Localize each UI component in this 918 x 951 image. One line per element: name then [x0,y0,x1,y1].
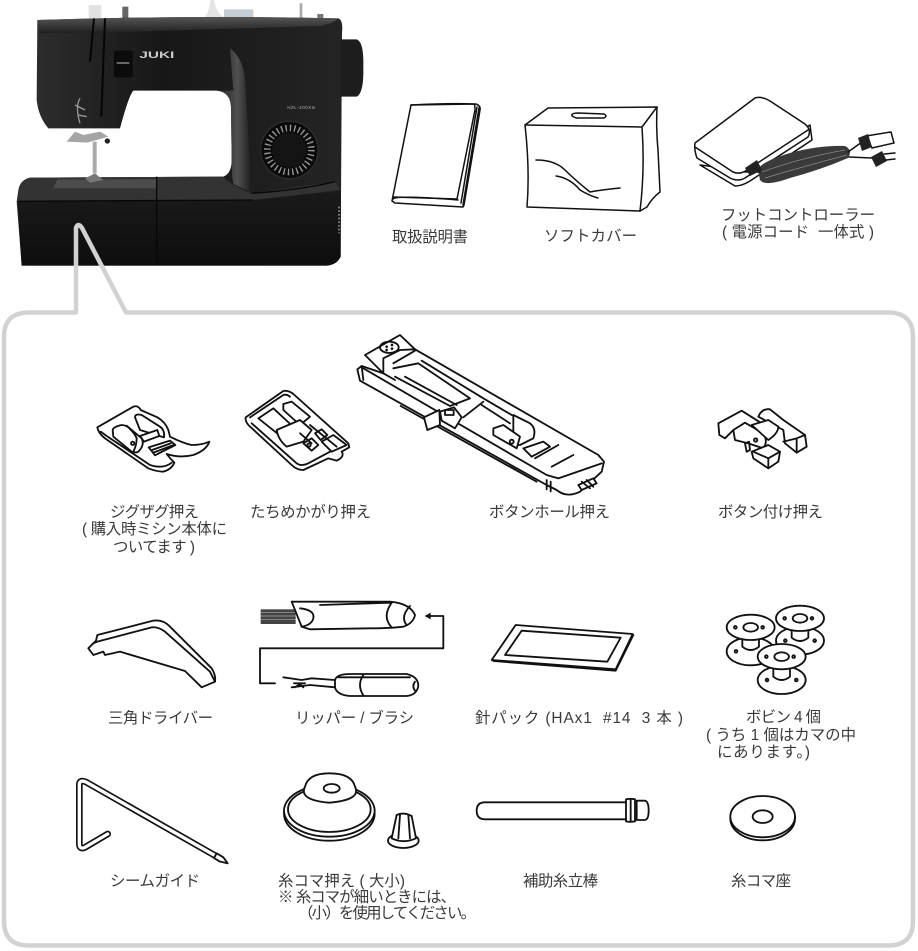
handwheel [341,39,363,97]
zigzag foot label: ジグザグ押え [110,503,199,521]
bobbins icon [727,606,824,694]
triangle screwdriver icon [88,620,215,687]
spool felt label: 糸コマ座 [731,872,791,890]
machine bed [18,177,340,201]
brush icon [261,602,415,629]
soft cover icon [525,107,660,211]
machine body [17,17,342,266]
front bobbin [758,644,806,694]
seams [18,177,335,263]
spool cap large icon [284,773,375,841]
spool cap label [278,872,476,922]
bobbin label: ( うち 1 個はカマの中 [706,726,856,744]
sewing machine photo [17,0,363,266]
seam ripper icon [283,674,418,696]
zigzag foot label: ( 購入時ミシン本体に [82,520,227,538]
button sewing foot icon [718,409,807,468]
instruction manual icon [392,104,480,207]
back bobbin left [727,615,775,665]
soft cover label: ソフトカバー [544,228,637,245]
foot controller icon [695,97,895,186]
seam guide icon [79,781,228,863]
back bobbin right [776,606,824,655]
spool cap label: 糸コマ押え ( 大小) [278,872,405,890]
overcast foot icon [246,391,349,470]
lower base [17,191,341,266]
ripper and brush label: リッパー / ブラシ [295,708,414,727]
brand logo: JUKI [139,50,174,60]
manual label: 取扱説明書 [392,228,468,246]
vent slots [336,207,342,233]
machine top fittings [89,0,323,20]
foot controller label: フットコントローラー [721,207,875,224]
foot controller label [721,207,875,241]
foot controller label: ( 電源コード 一体式 ) [722,223,874,241]
needle pack label: 針パック (HAx1 #14 3 本 ) [475,709,683,727]
stitch dial [261,121,318,179]
spool cap label: （小）を使用してください。 [298,904,476,922]
connecting arrow [260,613,443,683]
seam guide label: シームガイド [110,872,200,890]
zigzag foot label [82,503,227,556]
buttonhole foot label: ボタンホール押え [489,503,610,521]
spool felt icon [730,796,795,840]
thread guide slot [90,18,105,117]
spool cap small icon [388,814,419,848]
spool pin icon [477,799,649,822]
stitch selector [114,51,133,77]
bobbin label: にあります。) [717,743,810,761]
spool pin label: 補助糸立棒 [523,872,599,890]
needle pack icon [492,625,633,671]
top highlight [37,17,338,33]
bobbin label [706,708,856,761]
zigzag foot icon [97,406,209,472]
column highlight [217,48,252,193]
screwdriver label: 三角ドライバー [108,709,213,727]
buttonhole foot icon [357,335,604,495]
needle assembly [67,132,110,183]
decorative motif [75,98,87,123]
needle plate [53,179,156,188]
model name: HZL-400Xm [287,105,316,110]
zigzag foot label: ついてます ) [113,538,195,556]
overcast foot label: たちめかがり押え [250,503,371,521]
bobbin label: ボビン 4 個 [746,708,821,726]
button sewing foot label: ボタン付け押え [718,503,823,521]
accessories panel with callout pointer [4,225,913,946]
spool cap label: ※ 糸コマが細いときには、 [278,888,456,906]
